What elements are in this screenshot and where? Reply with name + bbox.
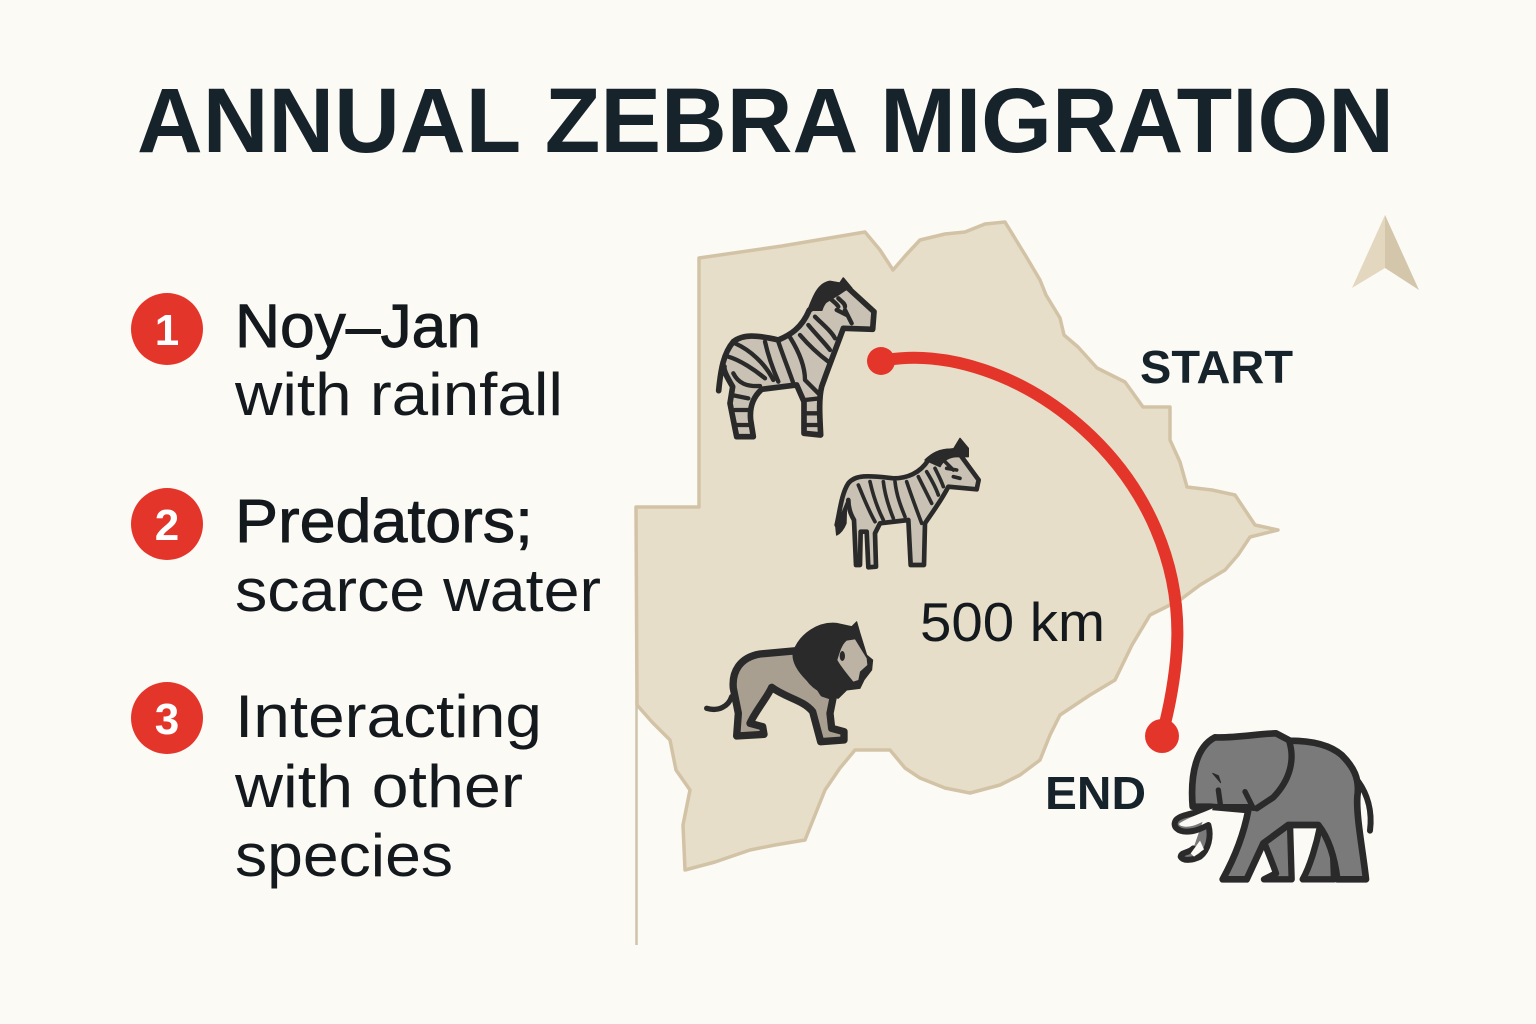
jaw and tusk base <box>1208 790 1253 808</box>
panel: numbered list <box>131 292 601 889</box>
eye <box>1213 773 1221 783</box>
icon: lion <box>707 622 873 742</box>
tusk <box>1179 808 1213 827</box>
badge 2 <box>131 488 203 560</box>
migration route arrow <box>867 347 1179 753</box>
text block 2: Predators; <box>235 487 533 555</box>
ear <box>1257 742 1292 808</box>
label: END: END <box>1045 767 1146 819</box>
body <box>1192 733 1366 879</box>
text block 1: with rainfall <box>234 361 563 428</box>
label: distance: 500 km <box>920 591 1105 653</box>
text block 3 <box>234 683 542 889</box>
far front leg <box>1252 810 1292 879</box>
icon: zebra 1 <box>719 278 874 437</box>
far hind leg <box>1303 827 1334 879</box>
icon: north arrow <box>1352 215 1419 290</box>
label: START: START <box>1140 341 1293 393</box>
text block 3: species <box>235 822 453 889</box>
badge 1 <box>131 293 203 365</box>
badge 3 <box>131 682 203 754</box>
badge 2: 2 <box>155 501 179 550</box>
tail <box>1358 782 1371 831</box>
title: ANNUAL ZEBRA MIGRATION <box>137 70 1394 172</box>
text block 2: scarce water <box>235 557 601 624</box>
map: country shape <box>636 222 1278 870</box>
text block 1: Noy–Jan <box>235 292 481 360</box>
icon: elephant <box>1175 733 1371 879</box>
map: left border line <box>635 700 638 945</box>
text block 1 <box>234 292 563 428</box>
badge 1: 1 <box>155 306 179 355</box>
text block 3: Interacting <box>235 683 542 750</box>
text block 3: with other <box>234 753 523 820</box>
text block 2 <box>235 487 601 624</box>
icon: zebra 2 <box>836 438 979 567</box>
trunk <box>1175 810 1210 860</box>
badge 3: 3 <box>155 695 179 744</box>
